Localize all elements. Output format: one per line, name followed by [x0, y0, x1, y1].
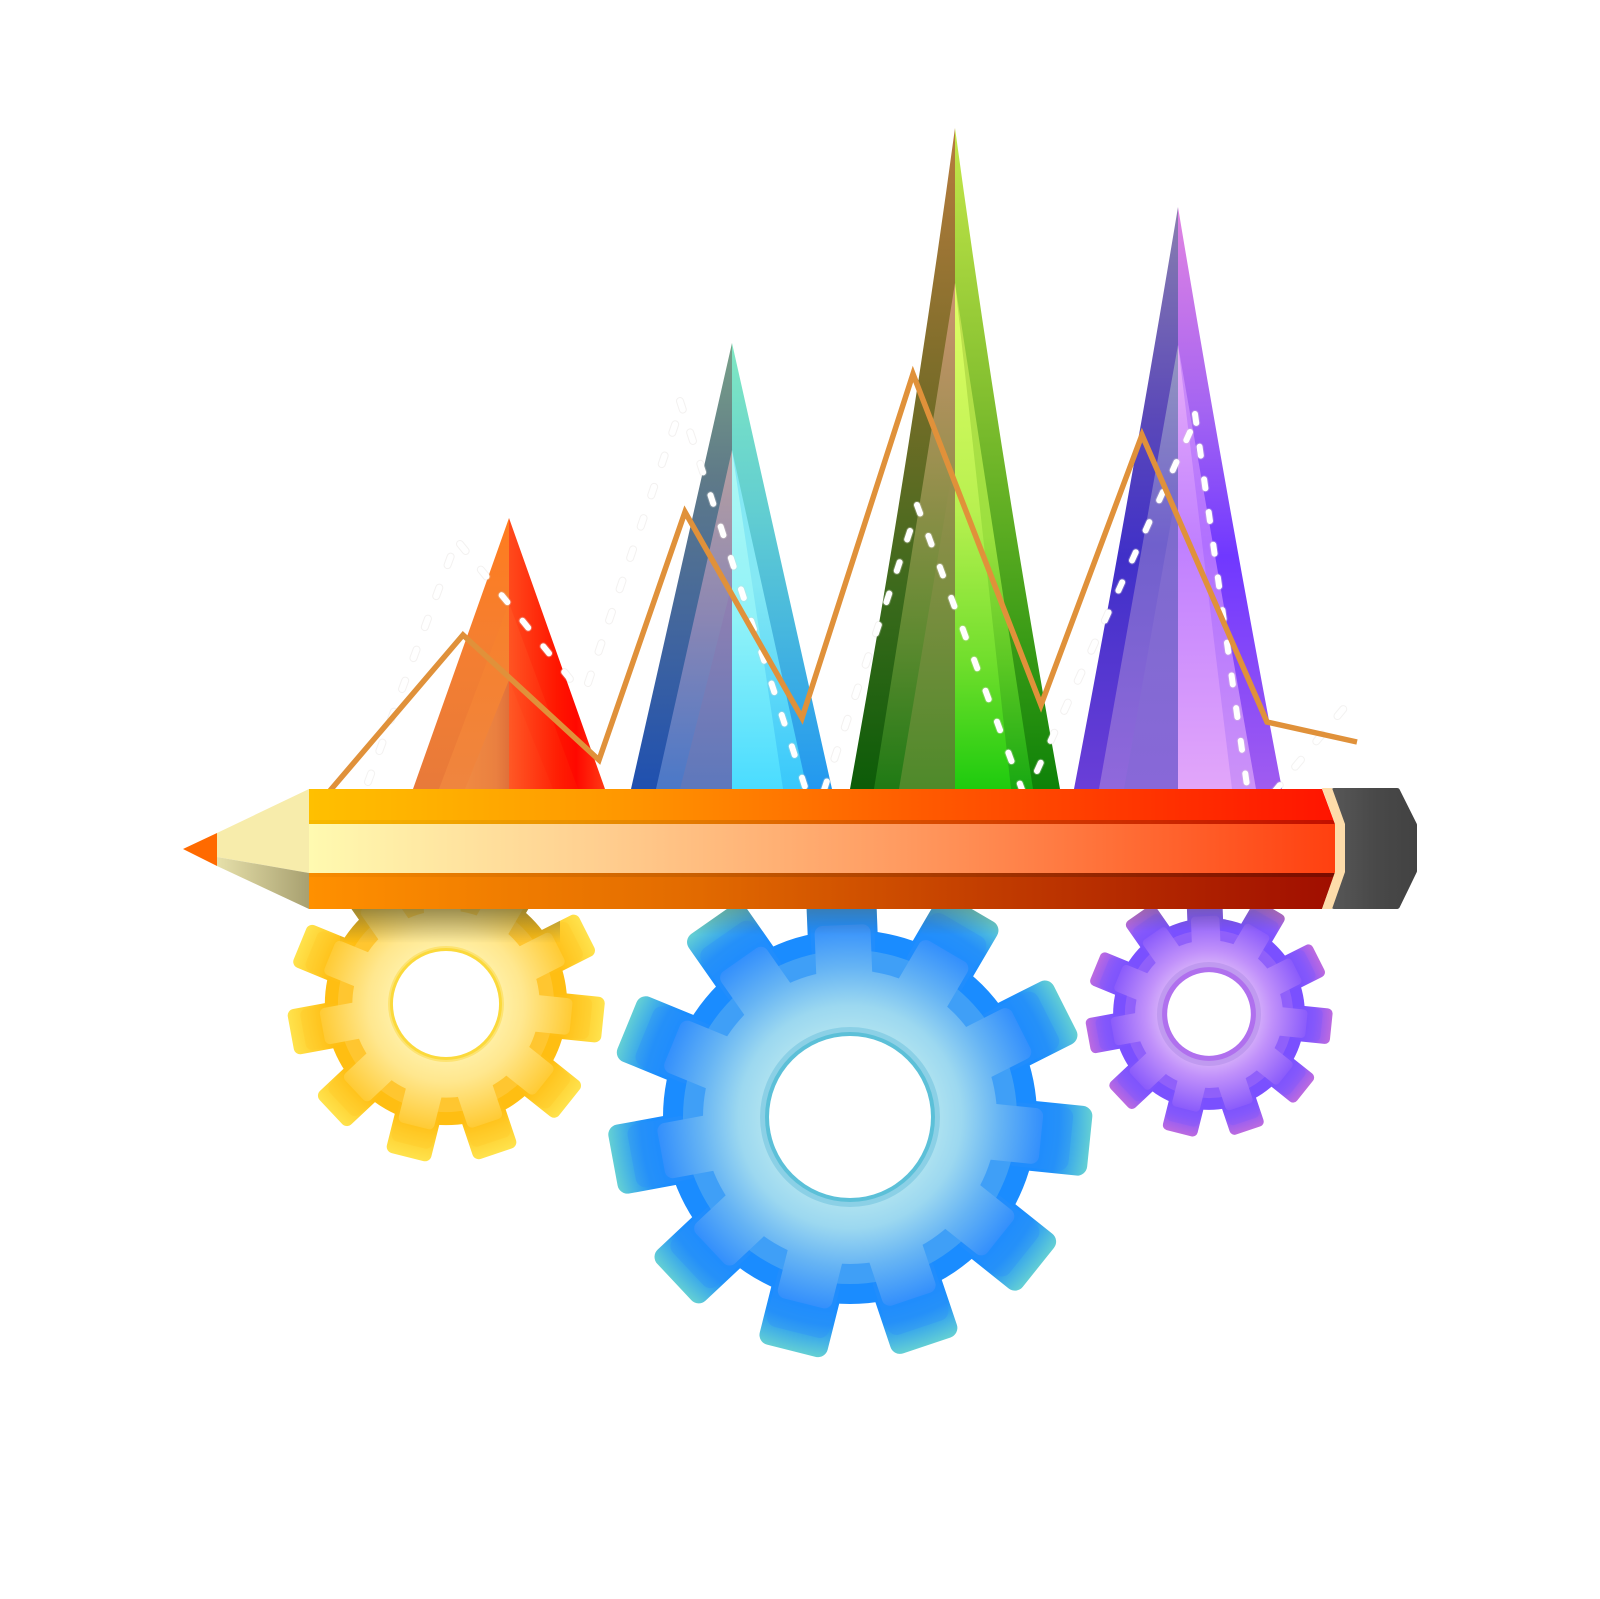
pencil lead tip [183, 833, 217, 866]
purple cone [1074, 207, 1282, 789]
green cone [850, 128, 1060, 789]
blue cone [631, 343, 832, 789]
gear: yellow [287, 845, 605, 1163]
pencil [183, 788, 1414, 909]
pencil top band [309, 789, 1335, 824]
pencil eraser [1334, 791, 1414, 906]
pencil ferrule stripe [1322, 788, 1345, 909]
gear: purple [1080, 890, 1340, 1138]
gear: blue [600, 875, 1100, 1359]
pencil middle band [309, 824, 1335, 873]
pencil wood cone [217, 789, 309, 909]
orange trend line [328, 374, 1357, 793]
dashed white trend line [368, 401, 1345, 800]
pencil bottom band [309, 873, 1335, 909]
red cone [413, 518, 605, 789]
